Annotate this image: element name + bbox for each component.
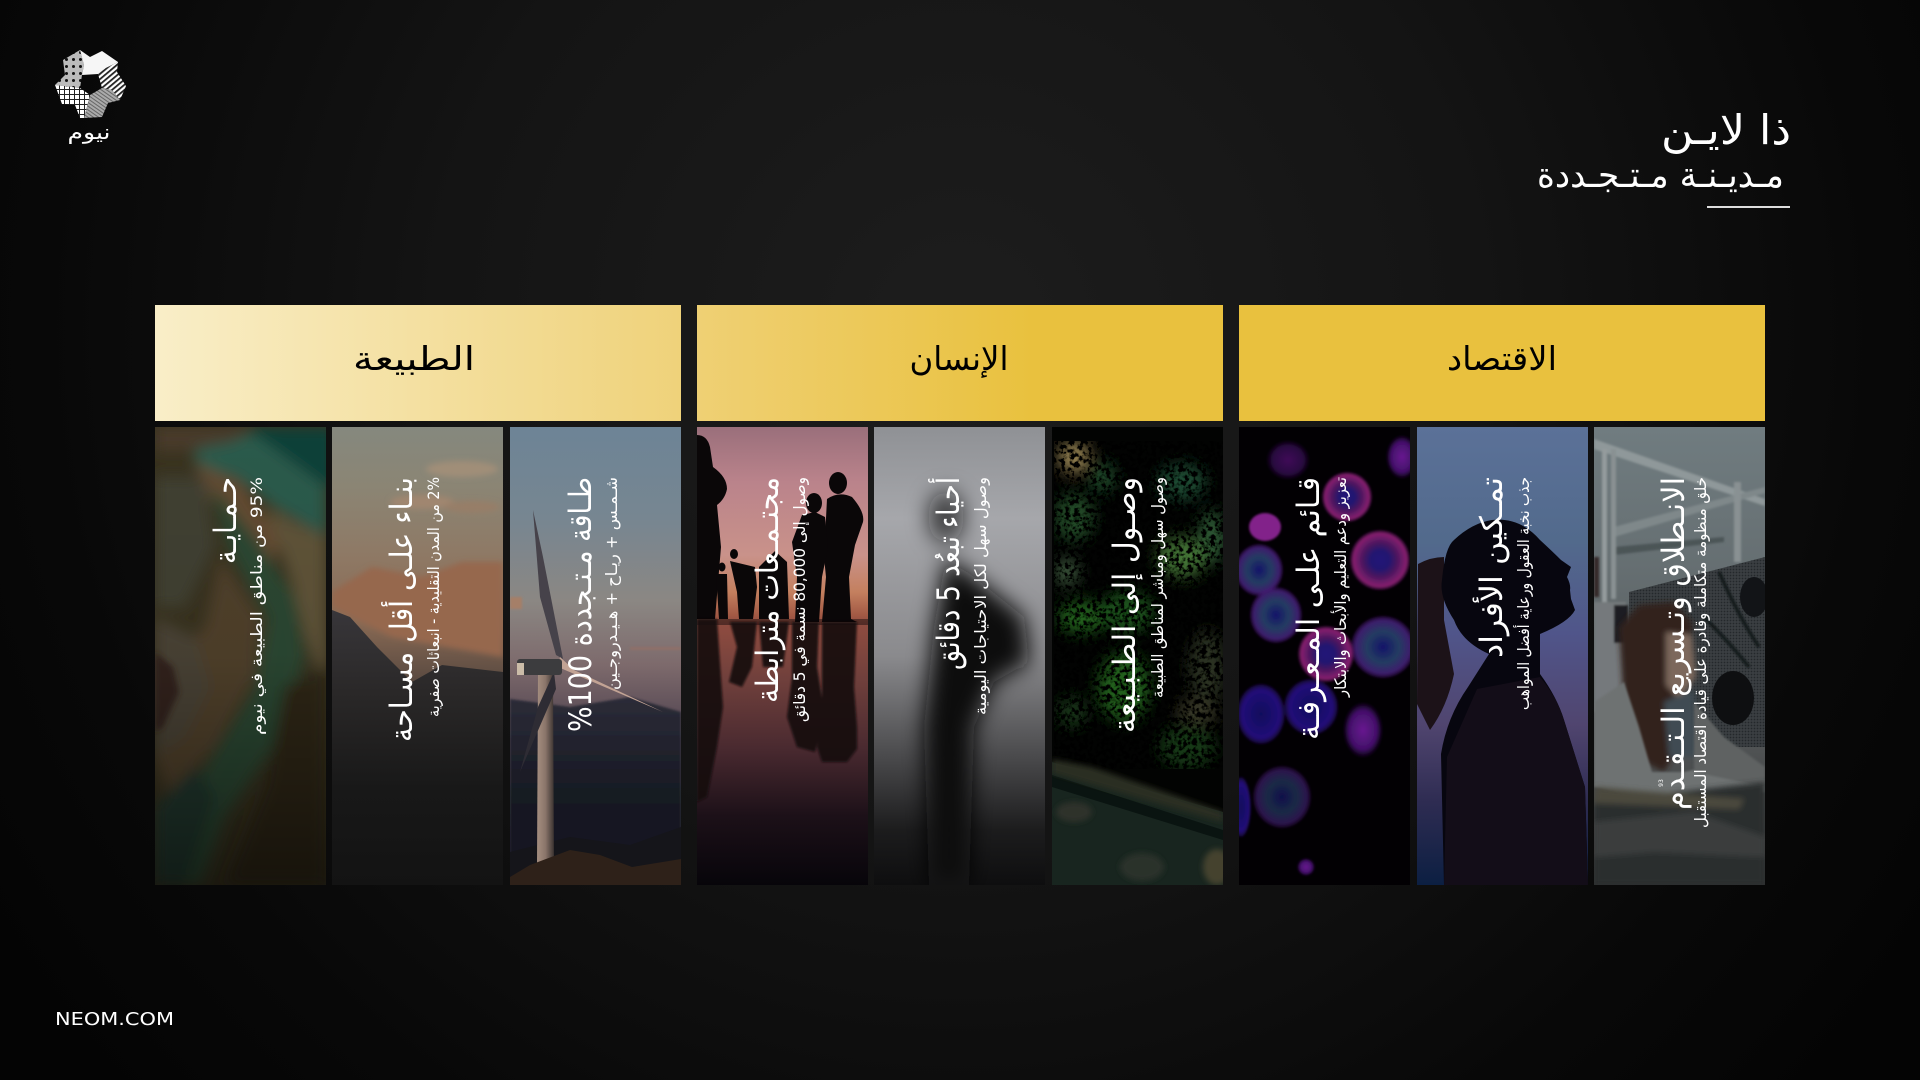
card title: طـاقة مـتـجددة 100% xyxy=(563,477,599,732)
card: building on least area xyxy=(332,427,503,885)
reflections xyxy=(697,619,857,802)
card title: بنـاء علـى أقل مسـاحة xyxy=(381,477,420,742)
card subtitle: 95% من مناطق الطبيعة في نيوم xyxy=(247,477,267,735)
card title: وصـول إلى الطـبـيعة xyxy=(1107,477,1143,733)
card subtitle: 2% من المدن التقليدية - انبعاثات صفرية xyxy=(424,477,444,717)
photo: figure behind frosted glass xyxy=(874,427,1045,885)
card: access to nature xyxy=(1052,427,1231,885)
card subtitle: وصول إلى 80,000 نسمة في 5 دقائق xyxy=(790,477,810,722)
photo: engineer in lab xyxy=(1594,427,1765,885)
photo: mountains at dusk xyxy=(332,427,503,885)
photo: fluorescent cells xyxy=(1239,427,1410,885)
panel: nature xyxy=(155,305,681,885)
wind turbine xyxy=(517,510,663,867)
photo: people silhouettes at sunset xyxy=(697,427,868,885)
card: five minute neighbourhoods xyxy=(874,427,1045,885)
card title: الانـطلاق وتـسريع الـتـقـدم xyxy=(1656,477,1692,810)
card: launch and accelerate xyxy=(1594,427,1768,885)
photo: woman in profile silhouette xyxy=(1417,427,1588,885)
icon: logo star top piece xyxy=(80,50,118,75)
photo: wind turbine xyxy=(510,427,681,885)
card subtitle: وصول سهل ومباشر لمناطق الطبيعة xyxy=(1148,477,1168,698)
title underline xyxy=(1707,206,1790,208)
card subtitle: وصول سهل لكل الاحتياجات اليومية xyxy=(971,477,991,715)
card: knowledge based xyxy=(1231,427,1418,885)
card title: أحياء تبعُد 5 دقائق xyxy=(928,477,967,670)
figures xyxy=(697,435,868,625)
icon: logo star bottom right piece xyxy=(84,88,120,118)
card: connected communities xyxy=(697,427,868,885)
footer: website: NEOM.COM xyxy=(55,1009,174,1030)
card: renewable energy xyxy=(510,427,681,885)
header: economy xyxy=(1239,305,1765,421)
title xyxy=(1537,106,1791,208)
photo: dark foliage xyxy=(1052,427,1223,885)
header: nature: الطبيعة xyxy=(353,339,475,378)
small note: 93 xyxy=(1658,779,1665,787)
heading: the line: ذا لايـن xyxy=(1661,106,1791,154)
icon: logo star left dotted piece xyxy=(55,50,84,88)
card title: مجتـمـعات مترابطة xyxy=(750,477,786,703)
card: protection xyxy=(155,427,335,885)
photo: aerial coast xyxy=(155,427,326,885)
card title: حـمـايـة xyxy=(208,477,244,564)
header: nature xyxy=(155,305,681,421)
icon: logo star right striped piece xyxy=(98,62,126,100)
logo: NEOM xyxy=(55,50,126,144)
logo wordmark: نيوم xyxy=(68,120,110,144)
card: empowering individuals xyxy=(1417,427,1588,885)
icon: logo star bottom left grid piece xyxy=(55,85,90,118)
header: people xyxy=(697,305,1223,421)
header: economy: الاقتصاد xyxy=(1447,339,1557,378)
card subtitle: خلق منظومة متكاملة وقادرة على قيادة اقتصاد المستقبل xyxy=(1691,477,1711,828)
card subtitle: شـمـس + ريـاح + هـيـدروجـين xyxy=(602,477,622,690)
card title: تمـكين الأفراد xyxy=(1472,477,1510,658)
panel: people xyxy=(697,305,1231,885)
subheading: regenerative city: مـديـنـة مـتـجـددة xyxy=(1537,156,1784,196)
card title: قـائم علـى المـعـرفـة xyxy=(1291,477,1327,740)
card subtitle: تعزيز ودعم التعليم والأبحاث والابتكار xyxy=(1330,477,1351,698)
header: people: الإنسان xyxy=(910,339,1008,378)
panel: economy xyxy=(1231,305,1768,885)
card subtitle: جذب نخبة العقول ورعاية أفضل المواهب xyxy=(1513,477,1534,710)
